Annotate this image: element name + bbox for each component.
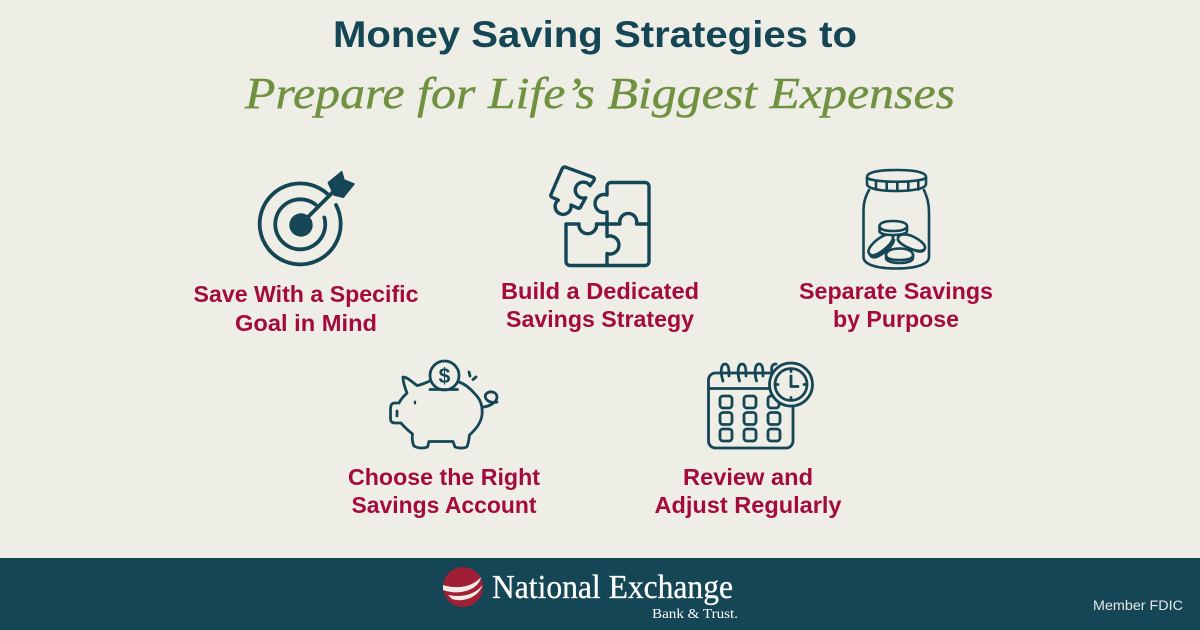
logo: Bank & Trust. bbox=[652, 607, 738, 622]
logo bbox=[443, 567, 738, 622]
icon: puzzle bbox=[551, 167, 649, 266]
label: Choose the Right bbox=[348, 464, 540, 490]
title: Money Saving Strategies to bbox=[333, 14, 857, 55]
label: Savings Account bbox=[352, 492, 537, 518]
label: Build a Dedicated bbox=[501, 278, 699, 304]
item: savings account bbox=[348, 361, 540, 518]
label bbox=[654, 464, 842, 518]
icon: coin jar bbox=[864, 170, 929, 268]
label: Separate Savings bbox=[799, 278, 993, 304]
icon: calendar with clock bbox=[708, 363, 812, 448]
item: specific goal bbox=[194, 172, 418, 336]
icon: target with arrow bbox=[260, 172, 354, 264]
label: Savings Strategy bbox=[506, 306, 694, 332]
icon: red globe bbox=[443, 567, 483, 607]
label bbox=[501, 278, 699, 332]
label: Goal in Mind bbox=[235, 310, 377, 336]
item: review and adjust bbox=[654, 363, 842, 518]
icon: piggy bank: $ bbox=[439, 365, 451, 388]
icon: piggy bank bbox=[390, 361, 497, 448]
label bbox=[799, 278, 993, 332]
item: separate savings bbox=[799, 170, 993, 332]
label bbox=[348, 464, 540, 518]
item: savings strategy bbox=[501, 167, 699, 332]
logo: National Exchange bbox=[492, 569, 733, 606]
label: Save With a Specific bbox=[194, 281, 418, 307]
footer band bbox=[0, 558, 1200, 630]
label: by Purpose bbox=[833, 306, 959, 332]
member fdic note: Member FDIC bbox=[1093, 598, 1183, 613]
label: Review and bbox=[683, 464, 813, 490]
title: Prepare for Life’s Biggest Expenses bbox=[244, 69, 955, 118]
label bbox=[194, 281, 418, 336]
title bbox=[244, 14, 955, 118]
label: Adjust Regularly bbox=[654, 492, 842, 518]
